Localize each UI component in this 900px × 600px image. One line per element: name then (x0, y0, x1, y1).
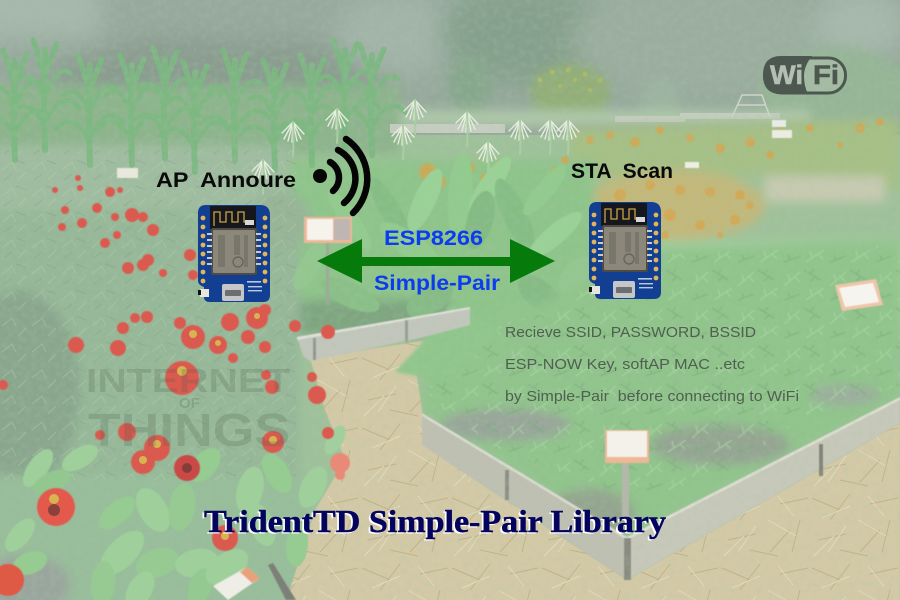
road (390, 113, 780, 133)
WiFi logo: Fi (813, 60, 839, 90)
description text: ESP-NOW Key, softAP MAC ..etc (505, 356, 746, 373)
left ESP8266 board (198, 205, 270, 302)
description text: by Simple-Pair before connecting to WiFi (505, 388, 799, 405)
description text: Recieve SSID, PASSWORD, BSSID (505, 324, 756, 341)
arrow label: ESP8266: ESP8266 (384, 227, 483, 250)
boards (297, 307, 900, 580)
bottom-left zinnia leaves (0, 422, 350, 600)
WiFi logo (763, 56, 846, 94)
herb texture on left bed (0, 150, 300, 480)
fern overhang on gravel (395, 305, 500, 380)
title: TridentTD Simple-Pair Library (204, 503, 666, 539)
icon: wireless signal (313, 139, 367, 213)
arrow label: Simple-Pair: Simple-Pair (374, 272, 500, 295)
watermark: Internet of Things (86, 362, 290, 456)
yellow shrub dots (538, 68, 602, 92)
swing frame (732, 95, 770, 117)
double-headed arrow (317, 239, 555, 283)
description text (505, 324, 799, 405)
raised bed foliage and soil (422, 240, 900, 537)
title: TridentTD Simple-Pair Library (202, 504, 664, 540)
AP heading: AP Annoure (156, 169, 296, 192)
red zinnias (0, 175, 350, 596)
plant labels (117, 120, 883, 600)
watermark: Internet of Things: THINGS (88, 404, 290, 456)
tobacco leaves (287, 151, 598, 324)
misty forest (0, 0, 900, 135)
watermark: Internet of Things: INTERNET (86, 362, 290, 399)
corn stalks (0, 40, 406, 172)
STA heading: STA Scan (571, 160, 673, 183)
white tobacco blossoms (252, 100, 579, 194)
WiFi logo: Wi (770, 60, 803, 90)
orange flowers (419, 118, 884, 239)
gravel path (285, 340, 900, 600)
watermark: Internet of Things: OF (179, 395, 200, 412)
right ESP8266 board (589, 202, 661, 299)
